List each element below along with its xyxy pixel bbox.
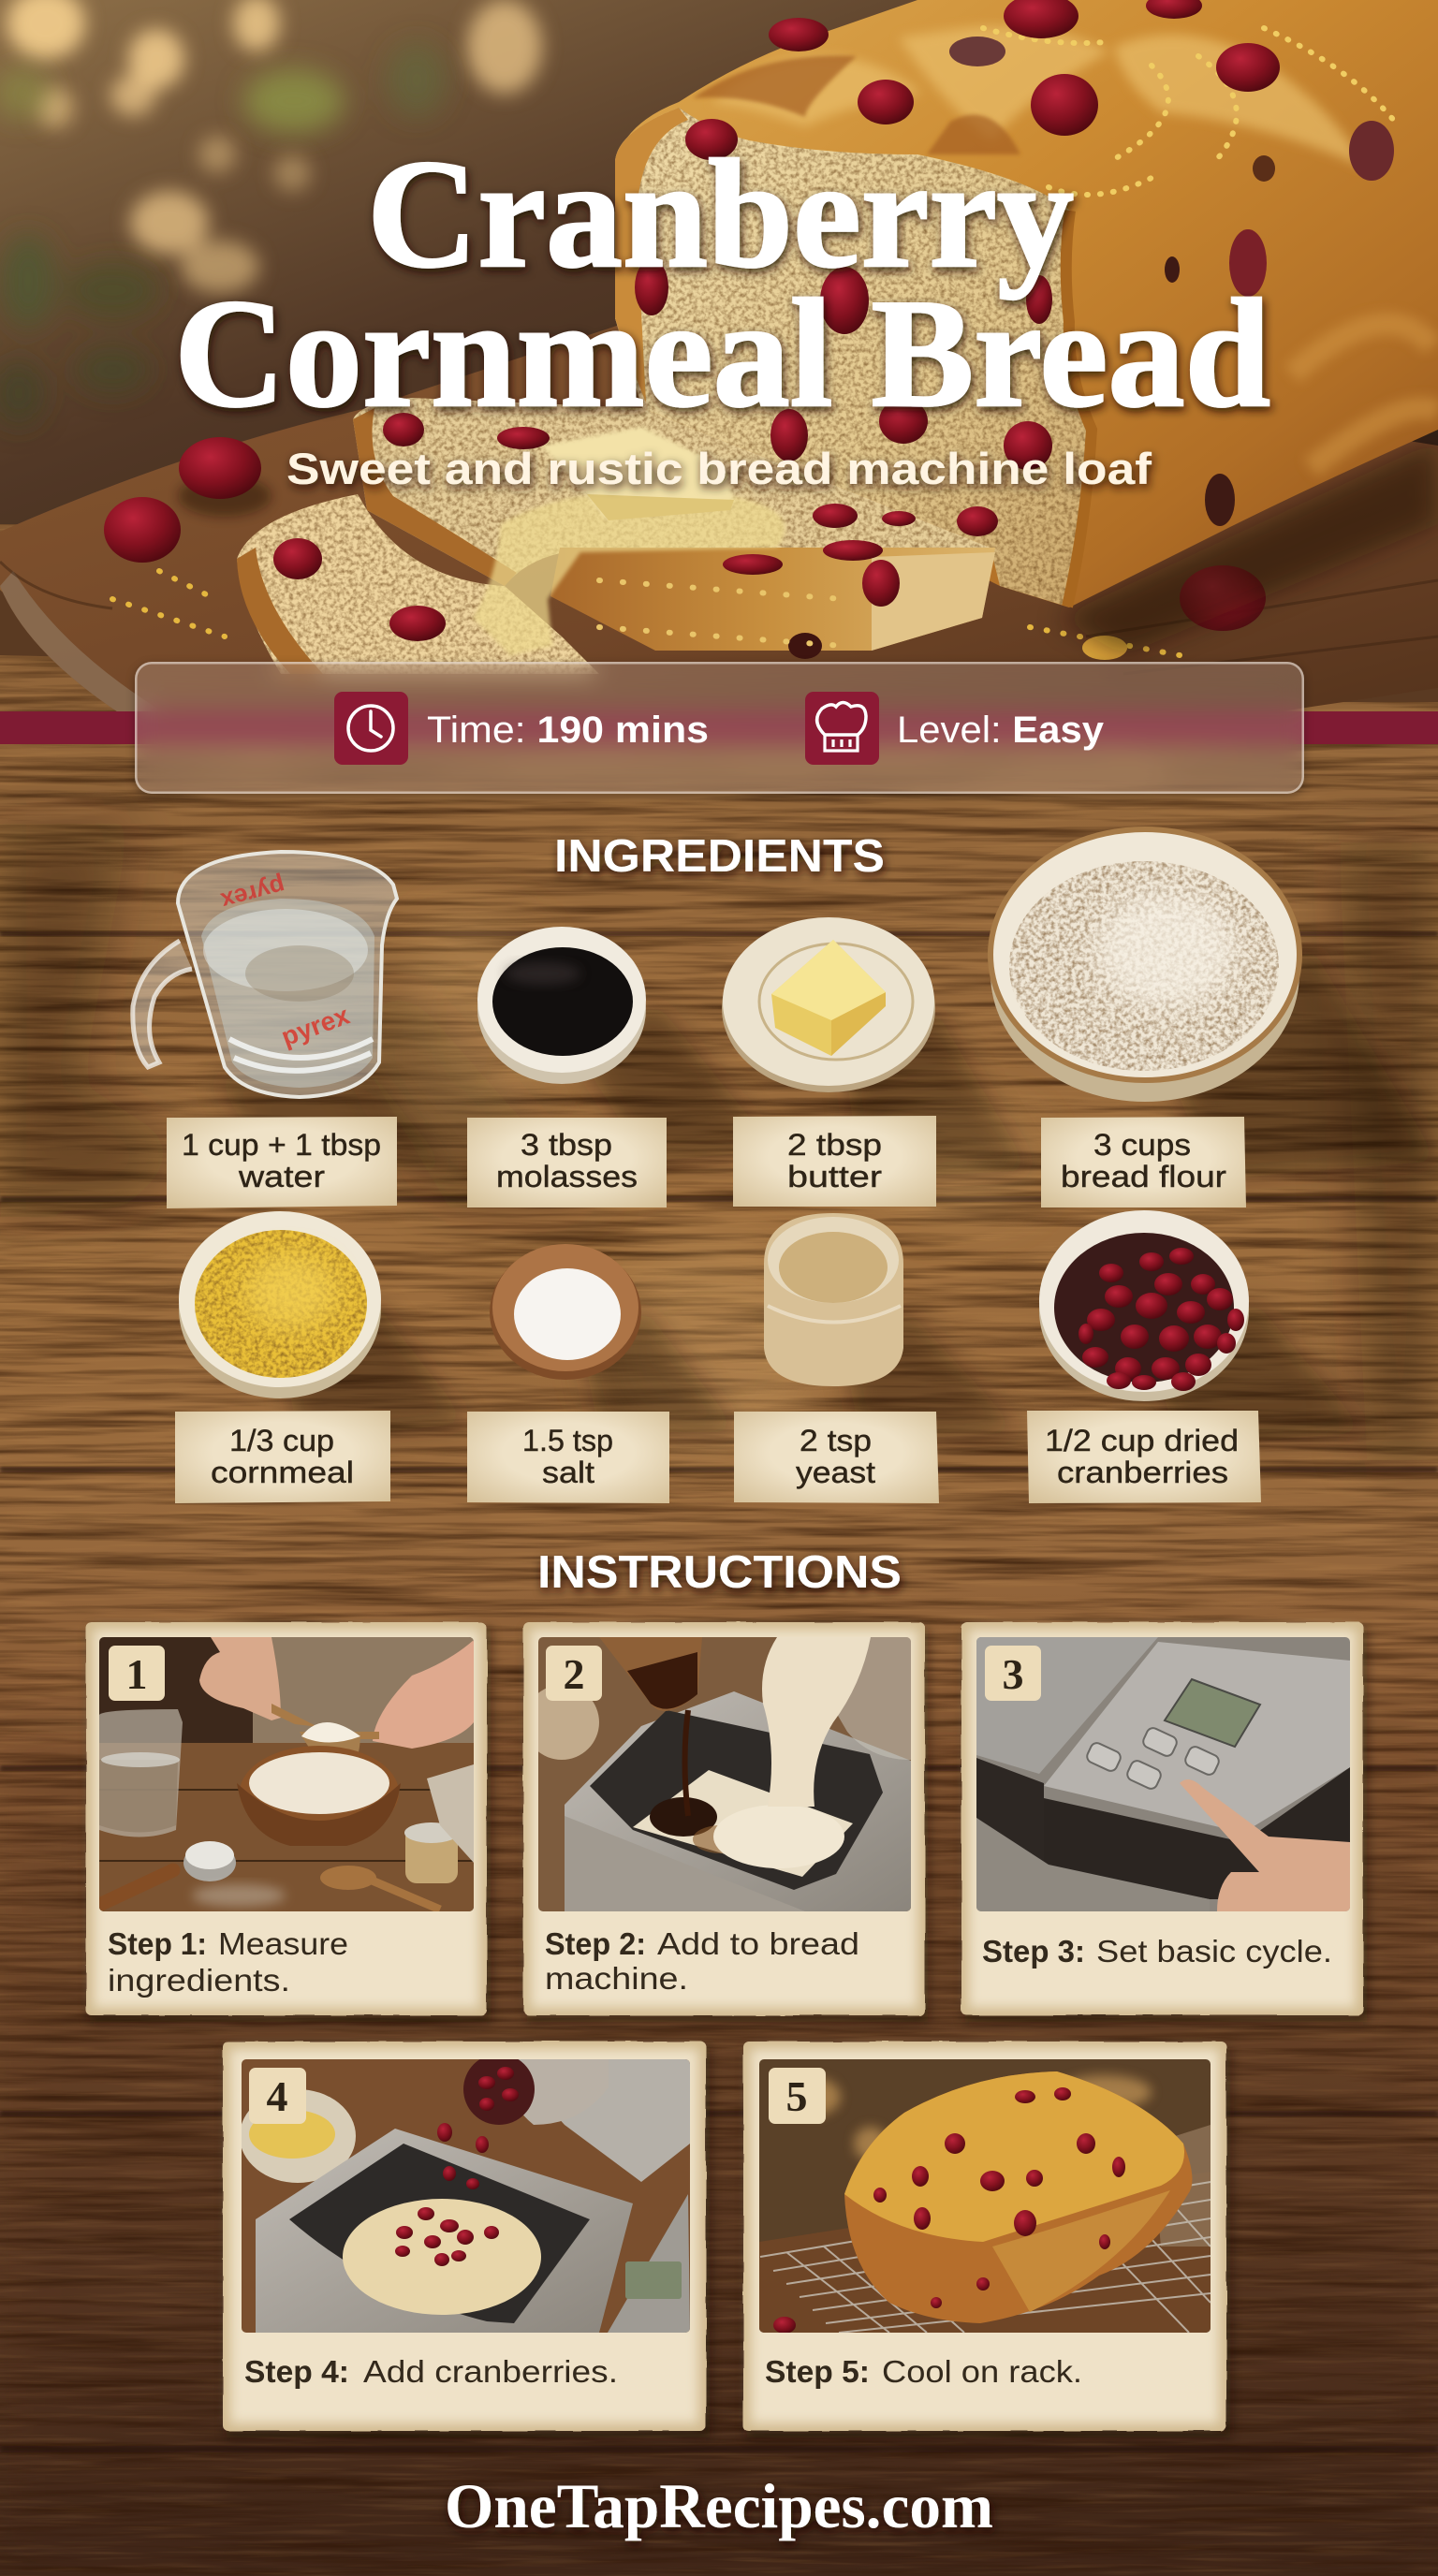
label: cornmeal: 1/3 cup [229, 1424, 334, 1457]
panel: ingredients [133, 829, 1438, 1503]
label: water: 1 cup + 1 tbsp [182, 1128, 381, 1162]
item: butter on plate [722, 917, 1030, 1179]
step 1 text: ingredients. [108, 1963, 290, 1998]
card: step 2 [523, 1622, 928, 2022]
heading: instructions: INSTRUCTIONS [537, 1547, 902, 1598]
label: butter: 2 tbsp [787, 1128, 882, 1162]
step 2 text: Add to bread [657, 1926, 859, 1961]
burgundy ribbon [0, 711, 1438, 744]
image: adding to bread machine [524, 1637, 911, 1911]
item: flour bowl [990, 829, 1438, 1179]
subtitle: Sweet and rustic bread machine loaf [286, 444, 1152, 493]
item: molasses bowl [477, 927, 777, 1161]
number badge 3 [985, 1646, 1041, 1701]
level text: Level: Easy [897, 710, 1105, 751]
number badge 2: 2 [564, 1650, 584, 1698]
step 1 text: Measure [218, 1926, 348, 1961]
number badge 3: 3 [1002, 1650, 1024, 1698]
step 5 text: Step 5: [765, 2354, 870, 2389]
number badge 4 [249, 2068, 306, 2124]
label: yeast [734, 1412, 939, 1503]
image: loaf cooling on rack [759, 2059, 1211, 2334]
footer: website: OneTapRecipes.com [445, 2470, 993, 2541]
number badge 4: 4 [266, 2072, 288, 2120]
title: Cranberry [367, 127, 1074, 300]
label: yeast: yeast [796, 1456, 875, 1489]
label: butter [733, 1116, 936, 1207]
label: yeast: 2 tsp [800, 1424, 872, 1457]
label: water [167, 1117, 397, 1208]
item: water in measuring cup: pyrex [277, 1001, 354, 1051]
label: bread flour: 3 cups [1093, 1128, 1191, 1162]
image: adding cranberries [240, 2054, 690, 2333]
label: molasses: 3 tbsp [521, 1128, 612, 1162]
hero backdrop with bokeh [0, 0, 1438, 524]
label: salt: salt [542, 1456, 594, 1489]
main loaf [615, 0, 1438, 655]
info bar: time and level [135, 662, 1304, 794]
label: molasses [467, 1118, 667, 1208]
item: cornmeal bowl [179, 1211, 468, 1442]
step 1 text: Step 1: [108, 1926, 207, 1961]
card: step 1 [86, 1622, 491, 2022]
item: water in measuring cup [133, 852, 449, 1170]
panel: instructions [86, 1547, 1367, 2437]
step 3 text: Set basic cycle. [1096, 1934, 1332, 1969]
hero photo: cranberry loaf on cutting board [0, 0, 1438, 721]
card: step 5 [743, 2042, 1230, 2437]
label: cornmeal [175, 1411, 390, 1503]
cutting board [0, 317, 1438, 721]
card: step 4 [223, 2042, 710, 2437]
step 4 text: Step 4: [244, 2354, 349, 2389]
label: butter: butter [787, 1160, 882, 1193]
number badge 1 [109, 1646, 165, 1701]
step 4 text: Add cranberries. [363, 2354, 618, 2389]
number badge 5 [769, 2068, 826, 2124]
label: cranberries: cranberries [1057, 1456, 1228, 1489]
icon: clock [334, 692, 408, 765]
icon: chef hat [805, 692, 879, 765]
image: measuring flour [99, 1637, 474, 1911]
image: setting the basic cycle [976, 1637, 1350, 1911]
number badge 5: 5 [786, 2072, 807, 2120]
label: bread flour [1041, 1117, 1246, 1208]
loose cranberries [104, 437, 1266, 660]
cut slices with melting butter [237, 398, 995, 674]
step 5 text: Cool on rack. [882, 2354, 1082, 2389]
heading: ingredients: INGREDIENTS [554, 831, 885, 882]
label: salt: 1.5 tsp [522, 1424, 613, 1457]
step 2 text: machine. [545, 1961, 688, 1996]
number badge 1: 1 [125, 1650, 148, 1698]
card: step 3 [961, 1622, 1367, 2022]
title [174, 127, 1270, 439]
item: water in measuring cup: pyrex [217, 871, 288, 915]
item: salt bowl [490, 1244, 740, 1432]
item: yeast jar [764, 1213, 1020, 1442]
item: dried cranberries bowl [1039, 1210, 1367, 1446]
step 2 text: Step 2: [545, 1926, 646, 1961]
label: salt [467, 1412, 669, 1503]
label: cornmeal: cornmeal [211, 1456, 354, 1489]
step 3 text: Step 3: [982, 1934, 1085, 1969]
label: cranberries: 1/2 cup dried [1045, 1424, 1239, 1457]
label: molasses: molasses [496, 1160, 638, 1193]
label: bread flour: bread flour [1061, 1160, 1226, 1193]
number badge 2 [546, 1646, 602, 1701]
title: Cornmeal Bread [174, 267, 1270, 439]
time text: Time: 190 mins [427, 710, 709, 751]
label: water: water [238, 1160, 325, 1193]
label: cranberries [1027, 1411, 1261, 1503]
